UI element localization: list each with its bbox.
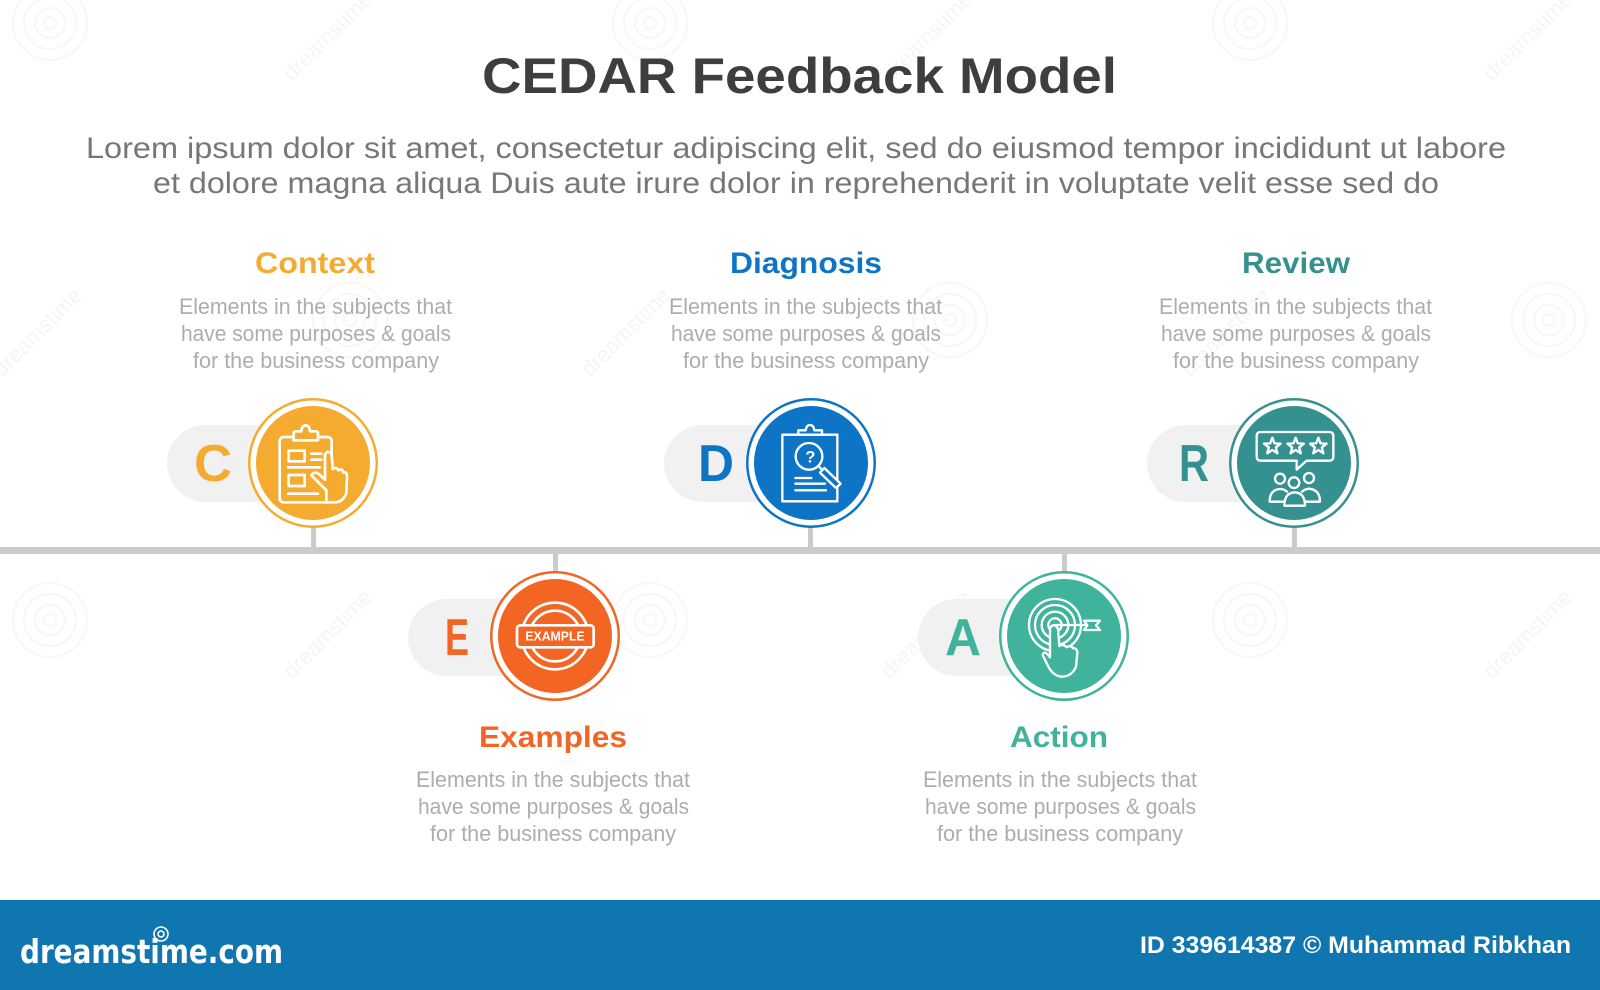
step: Review [1147,247,1432,528]
description: Review: Elements in the subjects that [1159,294,1432,319]
description: Diagnosis: for the business company [683,348,929,373]
description: Examples [416,767,690,846]
description: Diagnosis [669,294,942,373]
heading: Review: Review [1242,247,1351,280]
description: Review: for the business company [1173,348,1419,373]
footer logo text: dreamstime.com [20,932,283,971]
description: Diagnosis: have some purposes & goals [671,321,941,346]
letter pill: E [408,599,555,676]
description: Context [179,294,452,373]
letter pill: D [664,425,811,502]
description: Examples: Elements in the subjects that [416,767,690,792]
letter pill: R [1147,425,1294,502]
timeline with connectors [0,526,1600,573]
title: CEDAR Feedback Model [482,48,1117,104]
icon: logo spiral [154,927,168,941]
description: Action: have some purposes & goals [925,794,1196,819]
letter pill: C: C [194,435,232,493]
icon: clipboard with pointing hand [248,398,378,528]
icon: target with arrow and hand [999,571,1129,701]
description: Action: Elements in the subjects that [923,767,1197,792]
description: Context: for the business company [193,348,439,373]
heading: Action: Action [1010,721,1108,754]
heading: Context: Context [255,247,375,280]
description: Review: have some purposes & goals [1161,321,1431,346]
infographic canvas: dreamstime [278,585,377,684]
infographic canvas: dreamstime [1478,585,1577,684]
description: Examples: for the business company [430,821,676,846]
step: Context [167,247,452,528]
footer bar [0,900,1600,990]
subtitle paragraph: et dolore magna aliqua Duis aute irure dolor in reprehenderit in voluptate velit esse sed do [153,167,1439,200]
icon: example stamp: EXAMPLE [525,630,585,644]
letter pill: E: E [445,609,469,667]
description: Examples: have some purposes & goals [418,794,689,819]
infographic canvas: dreamstime [1176,283,1275,382]
heading: Examples: Examples [479,721,627,754]
infographic canvas: dreamstime [576,283,675,382]
icon: star rating speech bubble with people [1229,398,1359,528]
letter pill: A: A [945,609,981,667]
description: Action: for the business company [937,821,1183,846]
step: Action [918,571,1197,846]
letter pill: A [918,599,1064,676]
letter pill: C [167,425,313,502]
description: Context: Elements in the subjects that [179,294,452,319]
description: Diagnosis: Elements in the subjects that [669,294,942,319]
letter pill: D: D [698,435,734,493]
step: Diagnosis [664,247,942,528]
subtitle paragraph [86,132,1506,200]
heading: Diagnosis: Diagnosis [730,247,882,280]
icon: clipboard with magnifier [746,398,876,528]
subtitle paragraph: Lorem ipsum dolor sit amet, consectetur adipiscing elit, sed do eiusmod tempor incididunt ut labore [86,132,1506,165]
icon: clipboard with magnifier: ? [805,448,815,467]
icon: example stamp [490,571,620,701]
description: Context: have some purposes & goals [181,321,451,346]
footer credit: ID 339614387 © Muhammad Ribkhan [1140,932,1571,959]
infographic canvas: dreamstime [876,585,975,684]
letter pill: R: R [1179,435,1209,493]
description: Review [1159,294,1432,373]
description: Action [923,767,1197,846]
step: Examples [408,571,690,846]
